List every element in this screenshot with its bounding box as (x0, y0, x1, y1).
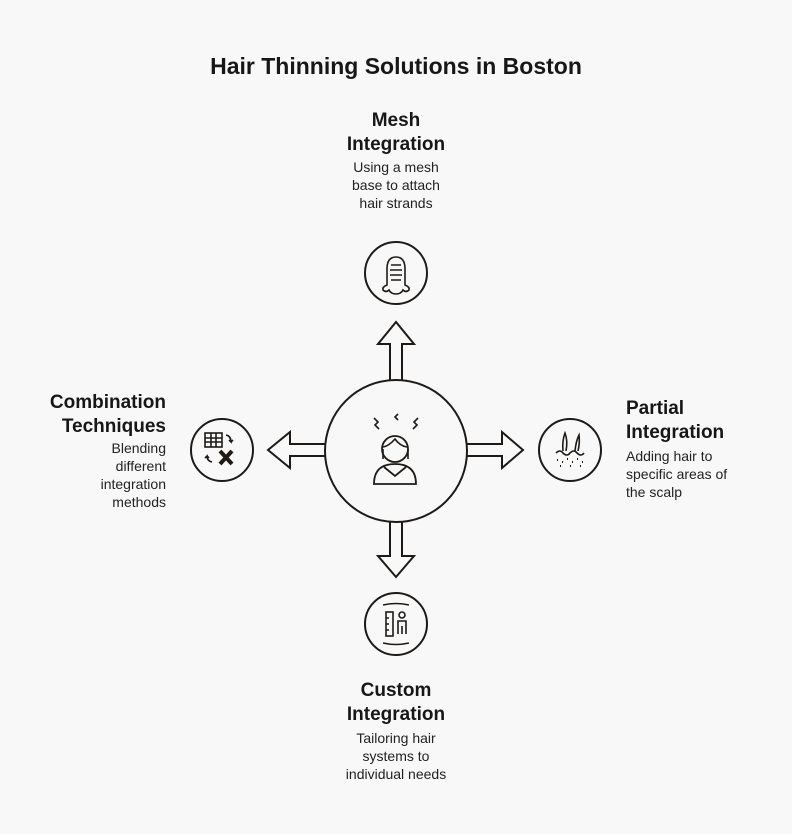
text: custom integration: Tailoring hair (356, 730, 436, 746)
text: partial integration: Adding hair to (626, 448, 712, 464)
text: custom integration (346, 680, 446, 782)
icon: custom integration (365, 593, 427, 655)
text: combination techniques: integration (101, 476, 166, 492)
icon: mesh integration (365, 242, 427, 304)
text: combination techniques: Blending (112, 440, 166, 456)
text: combination techniques: Combination (50, 392, 166, 413)
icon: partial integration (539, 419, 601, 481)
text: mesh integration: Using a mesh (353, 159, 439, 175)
text: partial integration: the scalp (626, 484, 682, 500)
text: mesh integration: Mesh (372, 110, 420, 131)
text: combination techniques: different (116, 458, 166, 474)
text: mesh integration (347, 110, 445, 211)
text: custom integration: Integration (347, 704, 445, 725)
text: combination techniques (50, 392, 166, 510)
arrow: up (378, 322, 414, 380)
arrow: right (467, 432, 523, 468)
text: partial integration: Partial (626, 398, 684, 419)
text: partial integration (626, 398, 728, 500)
text: mesh integration: Integration (347, 134, 445, 155)
text: mesh integration: base to attach (352, 177, 440, 193)
arrow: left (268, 432, 325, 468)
text: combination techniques: Techniques (62, 416, 166, 437)
title: Hair Thinning Solutions in Boston (210, 53, 582, 79)
arrow: down (378, 522, 414, 577)
text: custom integration: systems to (363, 748, 429, 764)
icon: combination techniques (191, 419, 253, 481)
text: custom integration: individual needs (346, 766, 446, 782)
text: partial integration: Integration (626, 422, 724, 443)
text: combination techniques: methods (112, 494, 166, 510)
text: custom integration: Custom (361, 680, 431, 701)
text: mesh integration: hair strands (359, 195, 433, 211)
center circle with person icon (325, 380, 467, 522)
text: partial integration: specific areas of (626, 466, 727, 482)
